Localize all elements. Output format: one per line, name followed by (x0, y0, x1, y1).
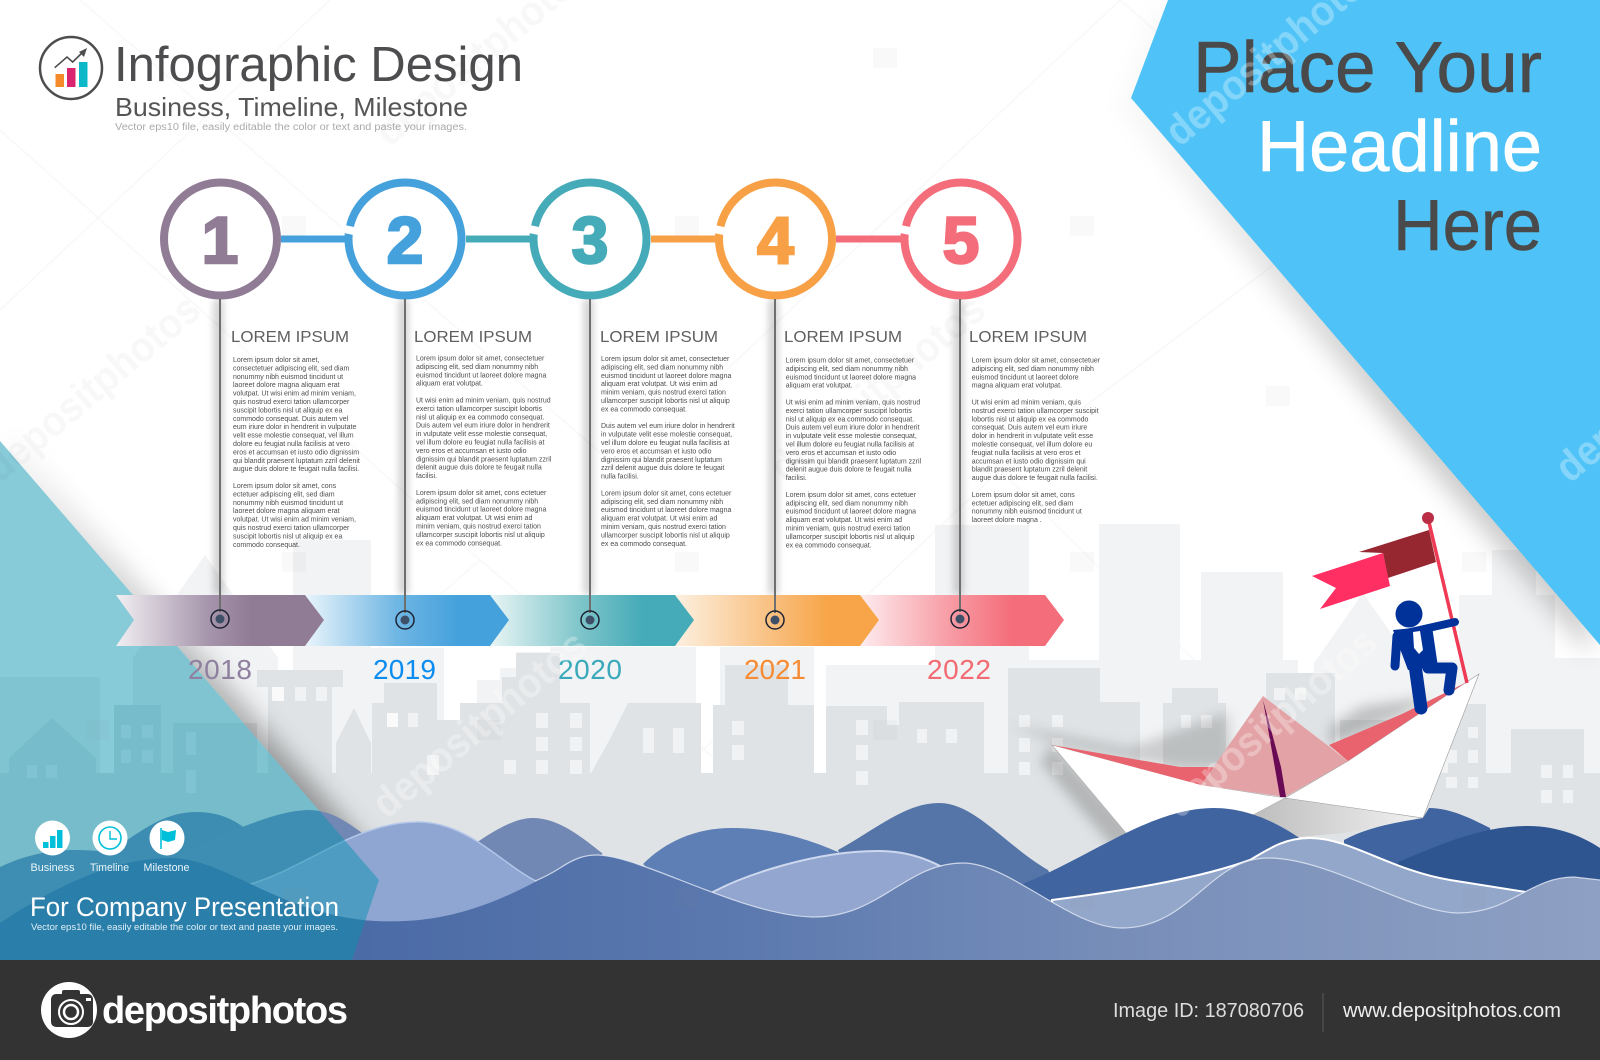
circle 4: 4 (757, 203, 794, 277)
paper boat with man and flag (1010, 512, 1479, 850)
year labels: 2022 (927, 654, 991, 685)
text block: column 1: eros et accumsan et iusto odio dignissim (233, 449, 359, 456)
arrow ribbon (116, 595, 1064, 646)
text block: column 3: Lorem ipsum dolor sit amet, consectetuer (601, 356, 730, 363)
text block: column 1: suscipit lobortis nisl ut aliquip ex ea (233, 533, 342, 540)
icon: timeline clock (92, 820, 128, 856)
text block: column 1: quis nostrud exerci tation ullamcorper (233, 525, 350, 532)
back waves (0, 803, 1070, 935)
text block: column 1: volutpat. Ut wisi enim ad minim veniam, (233, 517, 356, 524)
text block: column 3: in vulputate velit esse molestie consequat, (601, 432, 732, 439)
text block: column 1: velit esse molestie consequat, vel illum (233, 433, 354, 440)
ground (0, 773, 1600, 960)
flags (1359, 530, 1436, 578)
text block: column 3: Duis autem vel eum iriure dolor in hendrerit (601, 423, 735, 430)
text block: column 3: vero eros et accumsan et iusto odio (601, 448, 712, 455)
circle 1: 1 (202, 203, 238, 277)
circle 1 (164, 182, 277, 296)
text block: column 5: Lorem ipsum dolor sit amet, consectetuer (972, 358, 1101, 364)
text block: column 2: minim veniam, quis nostrud exerci tation (416, 524, 541, 530)
flag pole (1428, 518, 1467, 683)
circle 2: 2 (387, 203, 423, 277)
text block: column 4: adipiscing elit, sed diam nonummy nibh (786, 366, 908, 373)
text block: column 4 (784, 329, 923, 549)
icon: business bars (35, 820, 70, 856)
text block: column 4: Lorem ipsum dolor sit amet, consectetuer (786, 358, 915, 364)
boat shadows (1010, 696, 1432, 850)
title: Business, Timeline, Milestone (115, 92, 468, 122)
year labels: 2020 (558, 654, 622, 685)
text block: column 1: dolore eu feugiat nulla facilisis at vero (233, 441, 350, 448)
text block: column 1: laoreet dolore magna aliquam erat (233, 382, 340, 389)
text block: column 2: LOREM IPSUM (414, 329, 532, 346)
text block: column 4: exerci tation ullamcorper suscipit lobortis (786, 408, 912, 415)
text block: column 1: qui blandit praesent luptatum zzril delenit (233, 458, 360, 465)
text block: column 4: aliquam erat volutpat. Ut wisi enim ad (786, 517, 902, 524)
front waves (0, 808, 1600, 960)
icon: chart logo (40, 37, 102, 99)
text block: column 4: Lorem ipsum dolor sit amet, cons ectetuer (786, 492, 917, 499)
text block: column 2: in vulputate velit esse molestie consequat, (416, 431, 547, 438)
text block: column 1: suscipit lobortis nisl ut aliquip ex ea (233, 407, 342, 414)
circle 5: 5 (943, 203, 979, 277)
text block: column 1: commodo consequat. Duis autem vel (233, 416, 349, 423)
caption: company presentation: Vector eps10 file, easily editable the color or text and paste your images. (31, 922, 338, 933)
title: Vector eps10 file, easily editable the color or text and paste your images. (115, 122, 467, 133)
text block: column 3: aliquam erat volutpat. Ut wisi enim ad (601, 381, 717, 388)
text block: column 3: ex ea commodo consequat. (601, 406, 687, 413)
text block: column 5 (969, 329, 1102, 524)
headline: Place Your (1193, 28, 1542, 108)
text block: column 1: Lorem ipsum dolor sit amet, (233, 357, 319, 364)
text block: column 2: euismod tincidunt ut laoreet dolore magna (416, 507, 546, 514)
icon: milestone flag (150, 820, 184, 856)
text block: column 5: blandit praesent luptatum zzril delenit (972, 467, 1087, 474)
circle 4 (651, 182, 832, 296)
timeline pins (211, 299, 969, 629)
back buildings (0, 524, 1600, 788)
text block: column 1: augue duis dolore te feugait nulla facilisi. (233, 466, 359, 473)
text block: column 4: euismod tincidunt ut laoreet dolore magna (786, 509, 916, 516)
text block: column 5: ectetuer adipiscing elit, sed diam (972, 500, 1073, 507)
man (1393, 600, 1455, 708)
text block: column 5: nostrud exerci tation ullamcorper suscipit (972, 408, 1099, 415)
icon labels (30, 862, 190, 874)
text block: column 1: LOREM IPSUM (231, 329, 349, 346)
text block: column 1: nonummy nibh euismod tincidunt ut (233, 374, 343, 381)
sail (1201, 696, 1348, 797)
footer image id: Image ID: 187080706 (1113, 999, 1304, 1022)
footer logo (41, 982, 348, 1038)
text block: column 3: vel illum dolore eu feugiat nulla facilisis at (601, 440, 729, 447)
circle 2 (281, 182, 462, 296)
text block: column 2: exerci tation ullamcorper suscipit lobortis (416, 406, 543, 413)
connectors and numbered circles (164, 182, 1018, 296)
text block: column 4: minim veniam, quis nostrud exerci tation (786, 526, 911, 532)
text block: column 3: Lorem ipsum dolor sit amet, cons ectetuer (601, 490, 732, 497)
footer url: www.depositphotos.com (1342, 999, 1561, 1022)
year labels (188, 654, 991, 685)
text block: column 5: Ut wisi enim ad minim veniam, quis (972, 400, 1082, 406)
text block: column 2: Ut wisi enim ad minim veniam, quis nostrud (416, 398, 551, 404)
caption: company presentation: For Company Presentation (30, 892, 339, 922)
text block: column 5: consequat. Duis autem vel eum iriure (972, 425, 1087, 432)
inner folds (1052, 745, 1218, 785)
text block: column 4: ex ea commodo consequat. (786, 542, 872, 549)
text block: column 3: aliquam erat volutpat. Ut wisi enim ad (601, 516, 717, 523)
text block: column 1: volutpat. Ut wisi enim ad minim veniam, (233, 391, 356, 398)
icon labels: Timeline (90, 862, 129, 874)
text block: column 3: zzril delenit augue duis dolore te feugait (601, 465, 724, 472)
circle 3 (466, 182, 646, 296)
text block: column 4: euismod tincidunt ut laoreet dolore magna (786, 374, 916, 381)
text block: column 5: feugiat nulla facilisis at vero eros et (972, 450, 1081, 457)
text block: column 4: LOREM IPSUM (784, 329, 902, 346)
text block: column 1: commodo consequat. (233, 542, 300, 549)
text block: column 3: minim veniam, quis nostrud exerci tation (601, 524, 726, 531)
text block: column 2: vel illum dolore eu feugiat nulla facilisis at (416, 440, 544, 446)
text block: column 3: ullamcorper suscipit lobortis nisl ut aliquip (601, 532, 730, 539)
text block: column 2: aliquam erat volutpat. (416, 381, 483, 388)
text block: column 5: nonummy nibh euismod tincidunt ut (972, 509, 1082, 516)
text block: column 5: accumsan et iusto odio dignissim qui (972, 458, 1086, 465)
text block: column 2: dignissim qui blandit praesent luptatum zzril (416, 456, 552, 463)
year labels: 2021 (744, 654, 806, 685)
text block: column 2 (414, 329, 553, 547)
text block: column 2: delenit augue duis dolore te feugait nulla (416, 465, 542, 472)
text block: column 1 (231, 329, 362, 549)
text block: column 2: euismod tincidunt ut laoreet dolore magna (416, 372, 546, 379)
text block: column 5: molestie consequat, vel illum dolore eu (972, 442, 1092, 448)
text block: column 2: facilisi. (416, 473, 437, 480)
icon labels: Milestone (144, 862, 190, 874)
text block: column 2: nisl ut aliquip ex ea commodo consequat. (416, 414, 544, 421)
circle 3: 3 (572, 203, 608, 277)
panel shadows (21, 124, 1598, 832)
text block: column 1: eum iriure dolor in hendrerit in vulputate (233, 424, 356, 431)
text block: column 4: vel illum dolore eu feugiat nulla facilisis at (786, 442, 914, 448)
text block: column 3: nulla facilisi. (601, 474, 639, 481)
icon labels: Business (30, 862, 75, 874)
text block: column 5: LOREM IPSUM (969, 329, 1087, 346)
text block: column 2: vero eros et accumsan et iusto odio (416, 448, 527, 455)
text block: column 2: ex ea commodo consequat. (416, 540, 502, 547)
text block: column 4: dignissim qui blandit praesent luptatum zzril (786, 458, 922, 465)
windows (27, 687, 1573, 803)
text block: column 3: dignissim qui blandit praesent luptatum (601, 457, 722, 464)
watermarks: depositphotos (761, 285, 994, 491)
text block: column 1: quis nostrud exerci tation ullamcorper (233, 399, 350, 406)
text block: column 4: facilisi. (786, 475, 807, 482)
text block: column 5: euismod tincidunt ut laoreet dolore (972, 374, 1079, 381)
panel: blue headline corner (1131, 0, 1600, 645)
text block: column 3: LOREM IPSUM (600, 329, 718, 346)
text block: column 3: ex ea commodo consequat. (601, 541, 687, 548)
text block: column 4: vero eros et accumsan et iusto odio (786, 450, 896, 457)
text block: column 4: Duis autem vel eum iriure dolor in hendrerit (786, 425, 920, 432)
headline: Here (1393, 186, 1542, 266)
text block: column 4: nisl ut aliquip ex ea commodo consequat. (786, 416, 914, 423)
text block: column 4: adipiscing elit, sed diam nonummy nibh (786, 500, 908, 507)
watermarks: depositphotos (363, 621, 596, 827)
camera stamps (85, 48, 1486, 908)
title (114, 38, 523, 133)
text block: column 5: dolor in hendrerit in vulputate velit esse (972, 433, 1093, 440)
text block: column 5: lobortis nisl ut aliquip ex ea commodo (972, 416, 1089, 423)
watermarks: depositphotos (1155, 617, 1386, 827)
year labels: 2018 (188, 654, 252, 685)
year labels: 2019 (373, 654, 436, 685)
text block: column 4: in vulputate velit esse molestie consequat, (786, 433, 917, 440)
text block: column 4: ullamcorper suscipit lobortis nisl ut aliquip (786, 534, 915, 541)
text block: column 1: consectetuer adipiscing elit, sed diam (233, 365, 350, 372)
footer bar (0, 960, 1600, 1060)
text block: column 2: ullamcorper suscipit lobortis nisl ut aliquip (416, 532, 545, 539)
text block: column 3 (600, 329, 737, 548)
text block: column 1: ectetuer adipiscing elit, sed diam (233, 491, 335, 498)
text block: column 5: laoreet dolore magna . (972, 517, 1042, 524)
text block: column 5: adipiscing elit, sed diam nonummy nibh (972, 366, 1094, 373)
front buildings (9, 653, 1600, 808)
text block: column 1: nonummy nibh euismod tincidunt ut (233, 500, 343, 507)
text block: column 4: Ut wisi enim ad minim veniam, quis nostrud (786, 400, 920, 406)
text block: column 2: adipiscing elit, sed diam nonummy nibh (416, 364, 538, 371)
text block: column 3: euismod tincidunt ut laoreet dolore magna (601, 373, 731, 380)
headline (1193, 28, 1542, 266)
text block: column 3: adipiscing elit, sed diam nonummy nibh (601, 499, 723, 506)
text block: column 2: Lorem ipsum dolor sit amet, consectetuer (416, 356, 545, 362)
text block: column 2: Duis autem vel eum iriure dolor in hendrerit (416, 423, 550, 430)
text block: column 1: laoreet dolore magna aliquam erat (233, 508, 340, 515)
panel: teal triangle (0, 441, 379, 960)
text block: column 5: Lorem ipsum dolor sit amet, cons (972, 492, 1075, 499)
text block: column 4: delenit augue duis dolore te feugait nulla (786, 467, 912, 474)
text block: column 3: euismod tincidunt ut laoreet dolore magna (601, 507, 731, 514)
hull (1253, 798, 1423, 837)
text block: column 3: ullamcorper suscipit lobortis nisl ut aliquip (601, 398, 730, 405)
text block: column 2: adipiscing elit, sed diam nonummy nibh (416, 498, 538, 505)
footer logo: depositphotos (102, 990, 348, 1032)
text block: column 4: aliquam erat volutpat. (786, 383, 853, 390)
text block: column 3: minim veniam, quis nostrud exerci tation (601, 390, 726, 397)
text block: column 5: augue duis dolore te feugait nulla facilisi. (972, 475, 1098, 482)
text block: column 2: aliquam erat volutpat. Ut wisi enim ad (416, 515, 532, 522)
text block: column 1: Lorem ipsum dolor sit amet, cons (233, 483, 337, 490)
title: Infographic Design (114, 38, 523, 92)
text block: column 5: magna aliquam erat volutpat. (972, 383, 1062, 390)
text block: column 3: adipiscing elit, sed diam nonummy nibh (601, 364, 723, 371)
city skyline (0, 524, 1600, 960)
circle 5 (836, 182, 1018, 296)
timeline drop lines (214, 299, 963, 595)
headline: Headline (1257, 107, 1542, 187)
text block: column 2: Lorem ipsum dolor sit amet, cons ectetuer (416, 490, 547, 497)
